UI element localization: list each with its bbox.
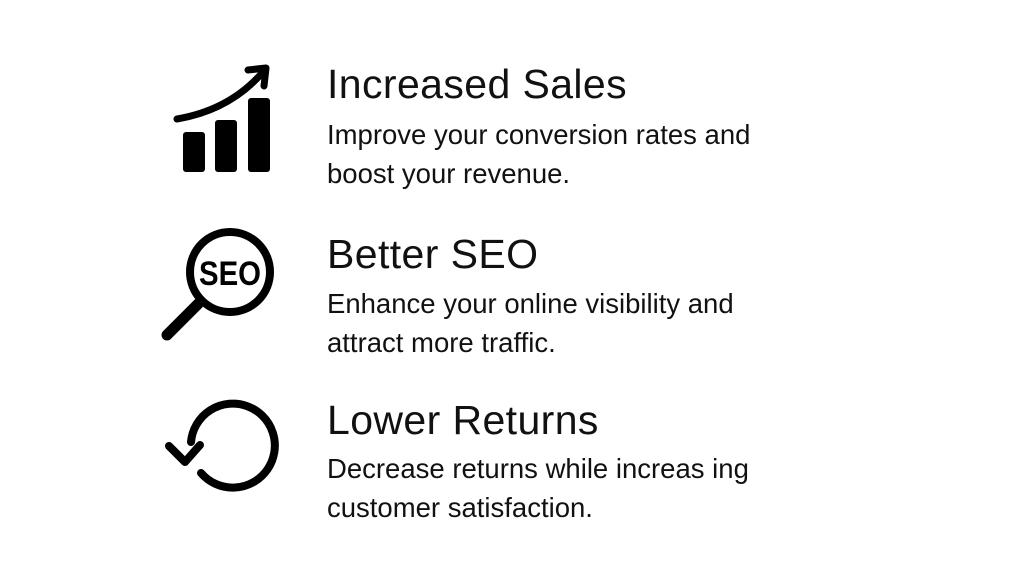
text: returns description: customer satisfaction. xyxy=(327,492,593,523)
text: SEO description: Enhance your online visibility and xyxy=(327,288,734,319)
text: returns description xyxy=(327,453,749,523)
text: sales description: boost your revenue. xyxy=(327,158,570,189)
icon: SEO magnifier: SEO xyxy=(199,255,261,293)
heading: Increased Sales: Increased Sales xyxy=(327,61,627,107)
heading: Better SEO: Better SEO xyxy=(327,231,538,277)
heading: Lower Returns: Lower Returns xyxy=(327,397,599,443)
text: returns description: Decrease returns while increas ing xyxy=(327,453,749,484)
text: SEO description xyxy=(327,288,734,358)
text: SEO description: attract more traffic. xyxy=(327,327,556,358)
text: sales description: Improve your conversion rates and xyxy=(327,119,750,150)
text: sales description xyxy=(327,119,750,189)
